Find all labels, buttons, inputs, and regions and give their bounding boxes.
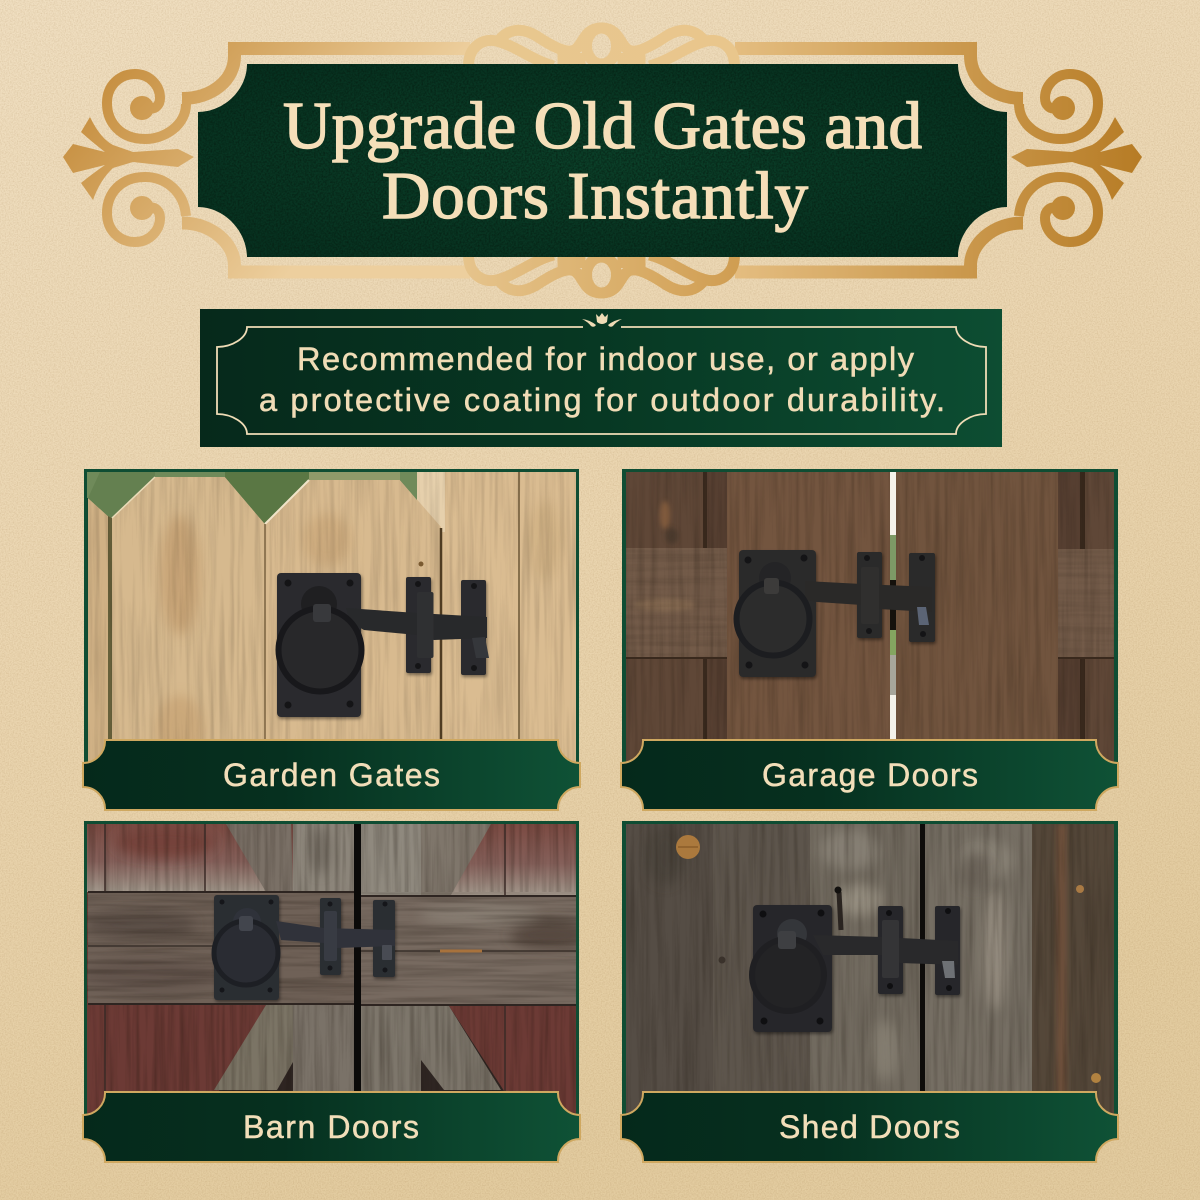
panel: garage doors — [621, 469, 1118, 810]
photo: grey weathered shed boards — [626, 824, 1114, 1116]
label ribbon: shed doors: Shed Doors — [779, 1109, 960, 1145]
panel: barn doors — [80, 821, 590, 1162]
blurred foliage background — [87, 472, 417, 524]
label ribbon: garden gates: Garden Gates — [223, 757, 440, 793]
icon: black latch hardware — [277, 573, 489, 717]
title text: Upgrade Old Gates and — [283, 89, 922, 163]
ornament: top centre flourish — [468, 28, 734, 66]
photo: pine wood gate — [87, 472, 576, 770]
icon: black latch hardware — [736, 550, 935, 677]
title text: Doors Instantly — [382, 159, 808, 233]
label ribbon: garage doors — [621, 740, 1118, 810]
label ribbon: shed doors — [621, 1092, 1118, 1162]
label ribbon: garage doors: Garage Doors — [762, 757, 978, 793]
photo: weathered barn doors — [80, 824, 590, 1116]
subtitle panel — [200, 309, 1002, 447]
title banner — [63, 28, 1142, 293]
icon: black latch hardware — [214, 895, 395, 1000]
label ribbon: barn doors — [83, 1092, 580, 1162]
label ribbon: garden gates — [83, 740, 580, 810]
ornament: right scrolls and fleur — [735, 48, 1142, 272]
label ribbon: barn doors: Barn Doors — [243, 1109, 419, 1145]
subtitle text: Recommended for indoor use, or apply — [297, 341, 915, 377]
panel: garden gates — [83, 469, 580, 810]
ornament: left scrolls and fleur — [63, 48, 470, 272]
icon: black latch hardware — [752, 905, 960, 1032]
panel: shed doors — [621, 821, 1118, 1162]
ornament: bottom centre flourish — [468, 255, 734, 293]
photo: brown stained doors — [626, 472, 1114, 764]
icon: tulip ornament — [582, 313, 622, 327]
subtitle text: a protective coating for outdoor durability. — [259, 382, 945, 418]
decorative inner frame — [217, 327, 986, 434]
green velvet plaque — [190, 60, 1015, 260]
subtitle text — [259, 341, 945, 418]
title text — [283, 89, 922, 233]
